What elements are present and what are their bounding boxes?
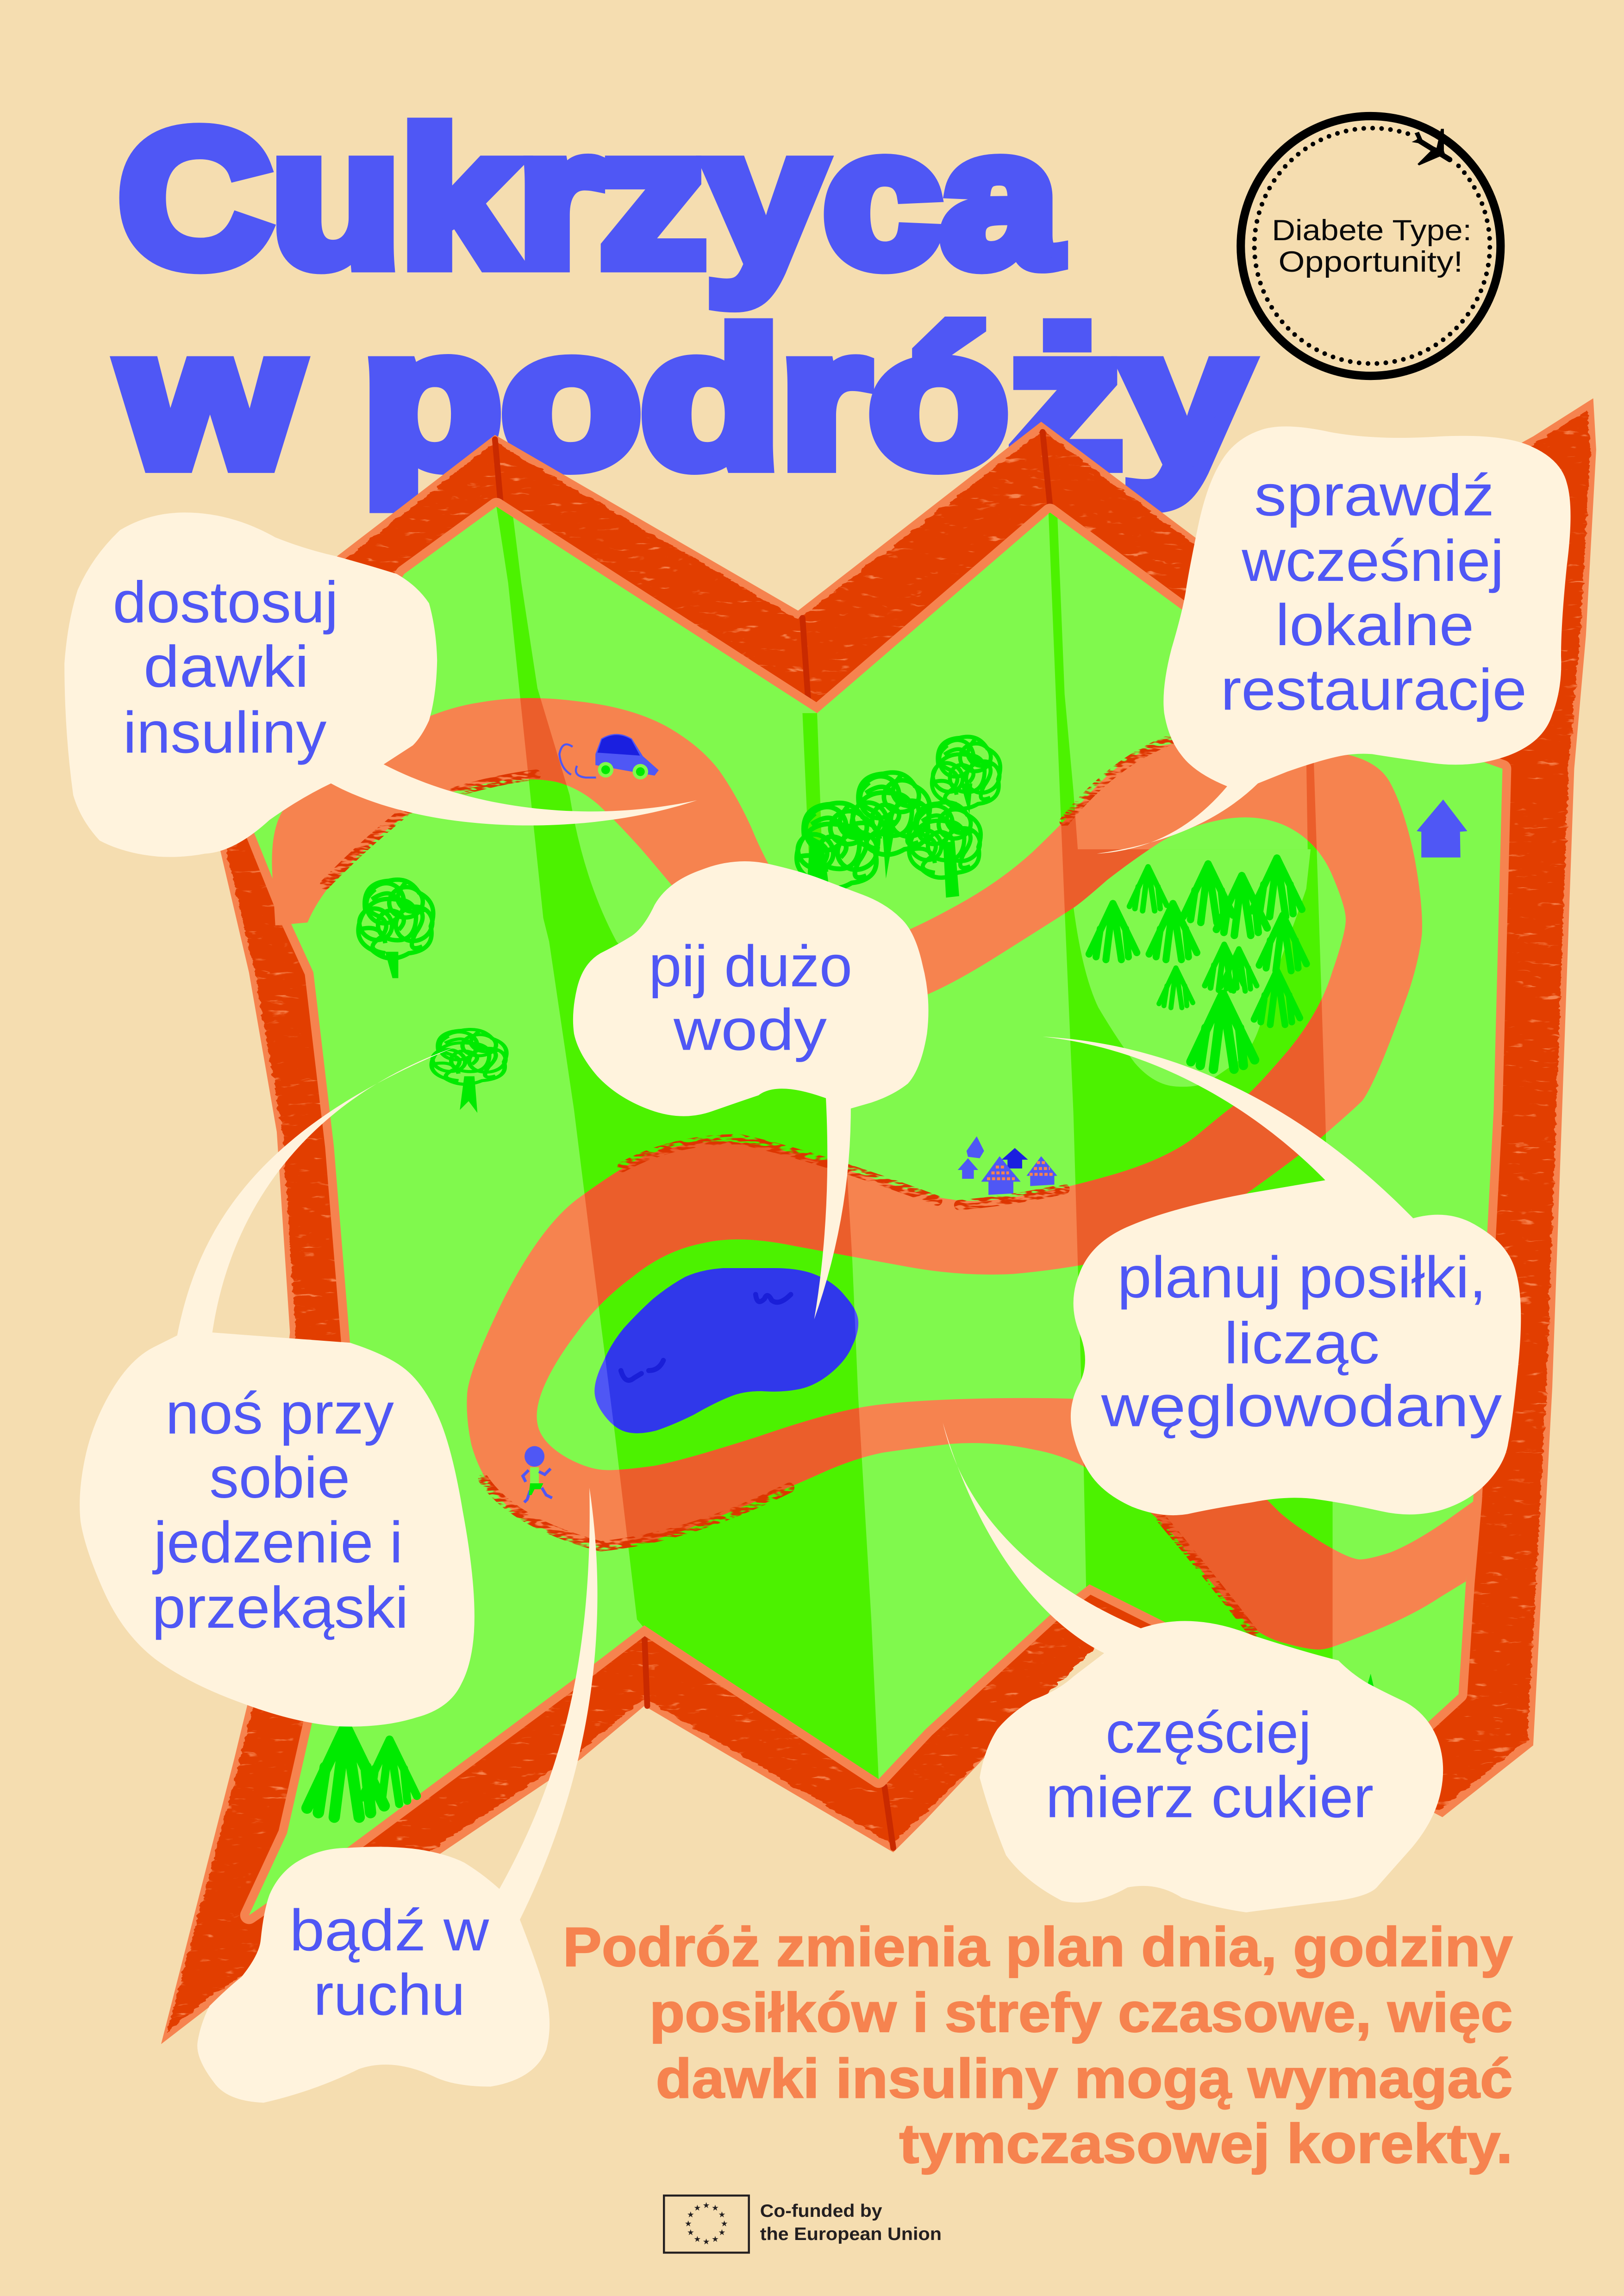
callout: częściej mierz cukier: mierz cukier [1046,1764,1374,1829]
logo: EU co-funded: ★ [712,2235,719,2244]
callout: noś przy sobie jedzenie i przekąski: sobie [209,1444,350,1510]
icon: car [559,734,659,779]
stamp: Diabete Type Opportunity: Diabete Type: [1272,214,1472,247]
title: w podróży [118,291,1250,508]
callout: pij dużo wody: pij dużo [649,933,852,999]
icon: walker [523,1446,552,1502]
callout: dostosuj dawki insuliny: dawki [144,634,309,699]
road [272,698,1476,1649]
callout: bądź w ruchu [197,1488,597,2103]
logo: EU co-funded: ★ [721,2219,728,2228]
title [118,91,1250,508]
callout: planuj posiłki licząc węglowodany [1043,1037,1521,1515]
logo: EU co-funded: ★ [685,2219,692,2228]
logo: EU co-funded: Co-funded by [760,2201,882,2221]
stamp: Diabete Type Opportunity: Opportunity! [1278,246,1463,278]
callout: częściej mierz cukier: częściej [1106,1699,1312,1765]
callout: noś przy sobie jedzenie i przekąski [80,1047,475,1727]
callout: dostosuj dawki insuliny: dostosuj [113,569,338,635]
logo: EU co-funded: ★ [712,2204,719,2213]
pine forest [307,858,1376,1817]
stamp: Diabete Type Opportunity [1241,116,1500,376]
text block: summary [563,1916,1513,2175]
map land [249,507,1502,1915]
logo: EU co-funded: ★ [703,2201,710,2210]
callout: sprawdź wcześniej lokalne restauracje [1097,426,1571,854]
logo: EU co-funded [664,2196,942,2252]
logo: EU co-funded: ★ [703,2237,710,2246]
logo: EU co-funded: ★ [718,2228,725,2238]
callout: częściej mierz cukier [943,1423,1443,1912]
callout: planuj posiłki licząc węglowodany: węglowodany [1101,1373,1502,1439]
callout: sprawdź wcześniej lokalne restauracje: wcześniej [1241,528,1504,593]
lake [594,1268,858,1433]
logo: EU co-funded: ★ [687,2228,694,2238]
logo: EU co-funded: ★ [687,2210,694,2220]
logo: EU co-funded: the European Union [760,2224,942,2244]
callout: noś przy sobie jedzenie i przekąski: przekąski [152,1574,409,1640]
callout: planuj posiłki licząc węglowodany: planuj posiłki, [1118,1244,1487,1310]
forest clearing [1074,849,1311,1087]
callout: sprawdź wcześniej lokalne restauracje: sprawdź [1254,462,1494,528]
map frame [161,398,1596,2044]
callout: bądź w ruchu: bądź w [289,1897,489,1963]
callout: bądź w ruchu: ruchu [313,1962,465,2028]
logo: EU co-funded: ★ [693,2235,701,2244]
callout: pij dużo wody [573,861,928,1319]
map [161,398,1596,2044]
icon: house [1417,799,1468,858]
map folds [496,507,1333,1779]
text block: summary: dawki insuliny mogą wymagać [656,2047,1513,2109]
callout: dostosuj dawki insuliny: insuliny [123,699,327,765]
icon: village [958,1136,1057,1195]
title: Cukrzyca [119,91,1060,307]
logo: EU co-funded: ★ [718,2210,725,2220]
callout: pij dużo wody: wody [673,997,827,1063]
callout: sprawdź wcześniej lokalne restauracje: lokalne [1275,592,1474,658]
logo: EU co-funded: ★ [693,2204,701,2213]
callout: noś przy sobie jedzenie i przekąski: noś przy [165,1380,394,1446]
callout: planuj posiłki licząc węglowodany: licząc [1224,1310,1380,1376]
text block: summary: Podróż zmienia plan dnia, godziny [563,1916,1513,1978]
callout: dostosuj dawki insuliny [64,512,697,857]
callout: noś przy sobie jedzenie i przekąski: jedzenie i [152,1509,403,1575]
trees [353,735,1005,1113]
text block: summary: posiłków i strefy czasowe, więc [650,1982,1513,2044]
callout: sprawdź wcześniej lokalne restauracje: restauracje [1221,657,1527,722]
text block: summary: tymczasowej korekty. [899,2113,1513,2175]
